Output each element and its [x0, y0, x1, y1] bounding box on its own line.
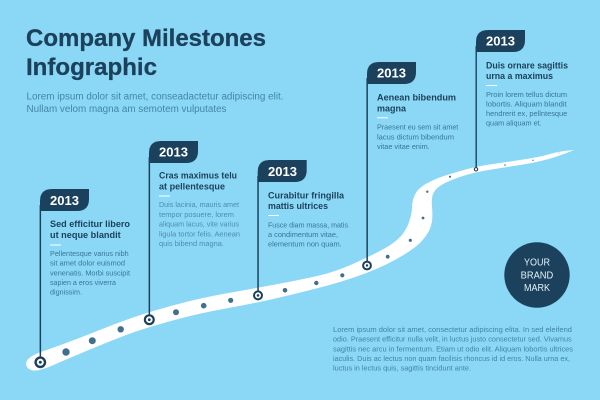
title: Company Milestones	[26, 25, 266, 52]
subtitle text: Lorem ipsum dolor sit amet, conseadactetur adipiscing elit.	[26, 92, 284, 102]
footer paragraph: Lorem ipsum dolor sit amet, consectetur adipiscing elita. In sed eleifend	[333, 325, 572, 334]
heading 1: ut neque blandit	[50, 230, 121, 241]
title	[26, 25, 266, 81]
road dots	[62, 153, 559, 356]
body text 2: tempor posuere, lorem	[159, 210, 234, 219]
heading 2: at pellentesque	[159, 182, 225, 192]
heading 2	[159, 171, 237, 192]
heading 4: Aenean bibendum	[377, 93, 456, 104]
body text 5: quam aliquam et.	[486, 118, 542, 127]
body text 1	[50, 249, 131, 297]
body text 5: Proin lorem tellus dictum	[486, 90, 567, 99]
stem and marker 3	[254, 176, 262, 299]
heading 5	[486, 60, 568, 82]
flag 5	[476, 30, 525, 52]
timeline road	[26, 150, 574, 371]
body text 2: aliquam lacus, vite varius	[159, 220, 239, 229]
body text 5	[486, 90, 568, 127]
subtitle text: Nullam velom magna am semotem vulputates	[26, 104, 227, 115]
milestone 1	[36, 189, 131, 367]
subtitle text	[26, 92, 284, 115]
stem and marker 2	[145, 157, 154, 324]
body text 2: Duis lacinia, mauris amet	[159, 200, 240, 209]
heading 4	[377, 93, 456, 114]
body text 1: sit amet dolor euismod	[50, 259, 125, 268]
flag 1	[40, 189, 89, 211]
footer paragraph	[333, 325, 573, 373]
footer paragraph: luctus in lectus quis, sagittis tincidunt ante.	[333, 364, 471, 373]
flag 4	[367, 62, 416, 84]
heading 5: Duis ornare sagittis	[486, 60, 568, 71]
heading 3: Curabitur fringilla	[268, 190, 345, 201]
brand mark badge: YOUR	[524, 258, 550, 269]
body text 3: elementum non quam.	[268, 240, 342, 249]
flag 2: 2013	[159, 144, 188, 160]
flag 1: 2013	[50, 193, 79, 208]
footer paragraph: iaculis. Duis ac lectus non quam facilisis rhoncus id id eros. Nulla urna ex,	[333, 354, 570, 363]
body text 5: hendrerit ex, pellntesque	[486, 109, 567, 118]
heading 3	[268, 190, 345, 212]
milestone 5	[474, 30, 568, 171]
body text 1: Pellentesque varius nibh	[50, 249, 129, 258]
heading 3: mattis ultrices	[268, 201, 328, 212]
brand mark badge	[504, 242, 570, 308]
body text 5: lobortis. Aliquam blandit	[486, 100, 568, 109]
heading 4: magna	[377, 103, 407, 114]
milestone 2	[145, 141, 240, 324]
heading 1: Sed efficitur libero	[50, 219, 130, 230]
body text 1: sapien a eros viverra	[50, 278, 117, 287]
flag 2	[149, 141, 198, 163]
flag 5: 2013	[486, 34, 515, 48]
brand mark badge: BRAND	[521, 270, 553, 281]
body text 2	[159, 200, 240, 248]
heading 1	[50, 219, 130, 241]
flag 4: 2013	[377, 66, 406, 80]
body text 2: quis bibend magna.	[159, 239, 224, 248]
body text 1: venenatis. Morbi suscipit	[50, 268, 131, 277]
body text 1: dignissim.	[50, 288, 82, 297]
flag 3: 2013	[268, 164, 297, 179]
body text 4	[377, 123, 459, 151]
stem and marker 4	[363, 78, 371, 269]
body text 4: vitae vitae enim.	[377, 142, 430, 151]
body text 4: lacus dictum bibendum	[377, 132, 454, 141]
body text 3: Fusce diam massa, matis	[268, 220, 348, 229]
body text 3: a condimentum vitae,	[268, 230, 338, 239]
heading 2: Cras maximus telu	[159, 171, 237, 182]
body text 3	[268, 220, 348, 249]
footer paragraph: sagittis nec arcu in fermentum. Etiam ut odio elit. Aliquam lobortis ultrices	[333, 344, 573, 353]
stem and marker 1	[36, 205, 45, 367]
milestone 4	[363, 62, 459, 269]
body text 4: Praesent eu sem sit amet	[377, 123, 459, 132]
heading 5: urna a maximus	[486, 71, 553, 82]
stem and marker 5	[474, 46, 478, 171]
milestone 3	[254, 160, 348, 299]
brand mark badge: MARK	[524, 283, 550, 294]
footer paragraph: odio. Praesent efficitur nulla velit, in luctus justo consectetur sed. Vivamus	[333, 335, 572, 344]
body text 2: ligula tortor felis. Aenean	[159, 229, 240, 238]
title: Infographic	[26, 54, 157, 81]
